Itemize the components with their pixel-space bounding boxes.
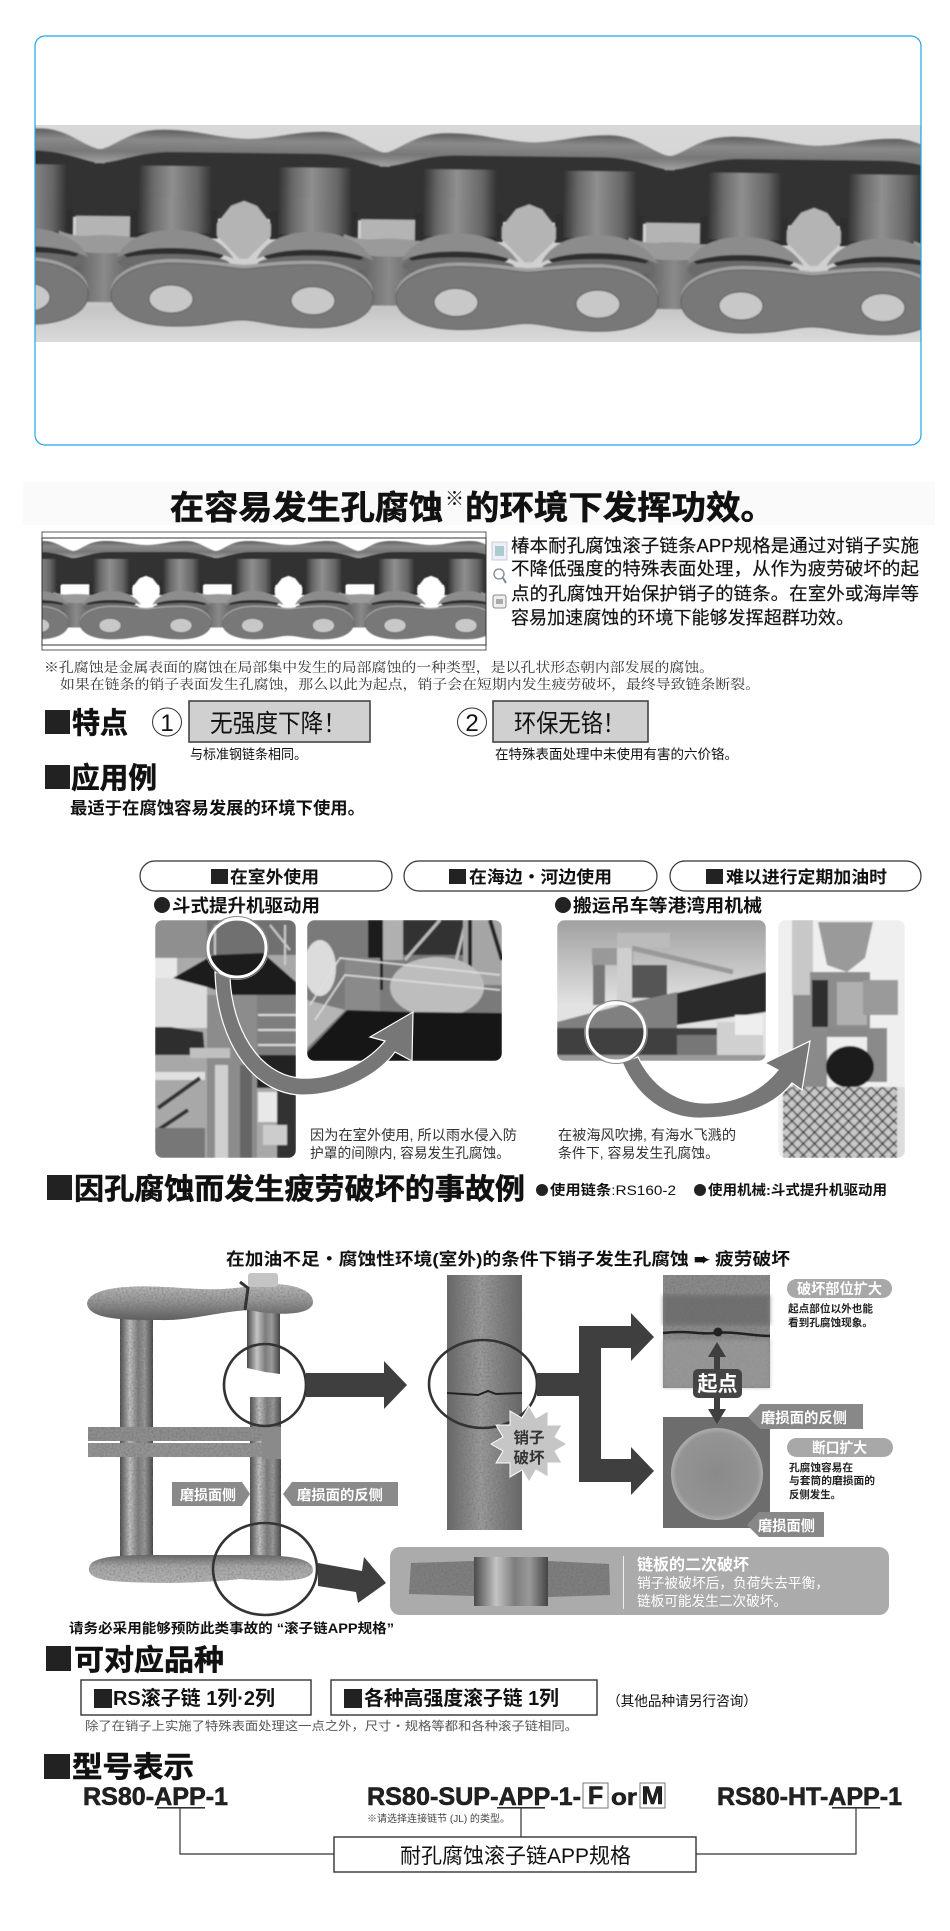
panel: secondary plate failure: 链板可能发生二次破坏。 — [637, 1593, 787, 1609]
caption: crane — [558, 1127, 736, 1161]
intro paragraph: 椿本耐孔腐蚀滚子链条APP规格是通过对销子实施 — [511, 536, 919, 556]
caption: crane: 在被海风吹拂, 有海水飞溅的 — [558, 1127, 736, 1143]
photo: elevator tower — [155, 920, 296, 1158]
tag: worn side — [172, 1482, 250, 1506]
heading: fatigue failure cases: 因孔腐蚀而发生疲劳破坏的事故例 — [74, 1173, 525, 1206]
pill: fracture zoom: 断口扩大 — [812, 1439, 867, 1457]
title band: ※ — [445, 489, 464, 510]
note: pitting location: 孔腐蚀容易在 — [789, 1461, 853, 1474]
title band: 在容易发生孔腐蚀 — [170, 489, 443, 526]
caption: elevator — [310, 1127, 517, 1161]
intro paragraph: 不降低强度的特殊表面处理，从作为疲劳破坏的起 — [511, 559, 919, 579]
panel: hero chain photo — [0, 36, 950, 445]
notice: 请务必采用能够预防此类事故的 “滚子链APP规格” — [69, 1620, 394, 1636]
model: HT: RS80-HT-APP-1 — [717, 1783, 902, 1811]
intro paragraph — [511, 536, 919, 628]
model: SUP with connecting link: M — [642, 1782, 664, 1810]
note: pitting location: 与套筒的磨损面的 — [789, 1474, 875, 1487]
pill: damage zoom: 破坏部位扩大 — [797, 1280, 882, 1298]
middle plates — [88, 1427, 268, 1441]
callout: origin point — [693, 1342, 742, 1424]
heading: features — [45, 707, 128, 740]
marker circle: crack — [429, 1340, 537, 1428]
heading: applications: 应用例 — [71, 762, 157, 795]
case meta: 使用链条 :RS160-2 — [550, 1182, 676, 1198]
photo: gantry crane — [557, 920, 766, 1061]
tag: worn side closeup — [747, 1512, 824, 1537]
feature 2 — [458, 701, 738, 762]
heading: applicable types: 可对应品种 — [74, 1644, 224, 1677]
feature 1: 与标准钢链条相同。 — [190, 746, 307, 762]
note: pitting elsewhere: 看到孔腐蚀现象。 — [788, 1316, 873, 1329]
tag: worn side closeup: 磨损面侧 — [758, 1518, 815, 1535]
panel: secondary plate failure — [390, 1547, 889, 1615]
case meta: 使用机械:斗式提升机驱动用 — [708, 1182, 887, 1198]
label: port cranes: 搬运吊车等港湾用机械 — [573, 895, 762, 916]
pill: seaside use — [404, 861, 657, 891]
note: connecting link type: ※请选择连接链节 (JL) 的类型。 — [367, 1812, 510, 1825]
box: high strength chain: 各种高强度滚子链 1列 — [364, 1686, 559, 1710]
feature 2: 在特殊表面处理中未使用有害的六价铬。 — [495, 746, 738, 762]
box: high strength chain — [331, 1680, 597, 1715]
starburst: pin failure — [491, 1406, 567, 1482]
arrow: elevator to drive unit — [206, 916, 413, 1095]
icon: image toolbar — [492, 542, 507, 608]
photo: fracture closeup — [663, 1417, 770, 1528]
marker circle: pin fracture — [224, 1344, 306, 1426]
heading: features: 特点 — [72, 707, 128, 740]
model: SUP with connecting link: F — [588, 1782, 603, 1810]
caption: elevator: 因为在室外使用, 所以雨水侵入防 — [310, 1127, 517, 1143]
note: pitting elsewhere: 起点部位以外也能 — [788, 1302, 874, 1315]
callout: origin point: 起点 — [698, 1373, 738, 1396]
photo: crane wheel — [778, 920, 905, 1158]
pill: damage zoom — [787, 1279, 892, 1298]
footnote: ※孔腐蚀是金属表面的腐蚀在局部集中发生的局部腐蚀的一种类型，是以孔状形态朝内部发展的腐蚀。 — [44, 659, 714, 676]
bottom plate — [89, 1555, 313, 1583]
model: SUP with connecting link: or — [611, 1784, 637, 1810]
pill: outdoor use: 在室外使用 — [230, 867, 319, 887]
caption: crane: 条件下, 容易发生孔腐蚀。 — [558, 1145, 719, 1161]
arrow: to pin closeup — [306, 1361, 407, 1409]
photo: broken plate — [409, 1557, 610, 1606]
case meta — [536, 1182, 887, 1198]
starburst: pin failure: 破坏 — [513, 1449, 545, 1467]
heading: model notation: 型号表示 — [72, 1751, 194, 1784]
intro paragraph: 容易加速腐蚀的环境下能够发挥超群功效。 — [511, 608, 854, 628]
tag: opposite side of wear — [748, 1404, 863, 1429]
note: pitting elsewhere — [788, 1302, 874, 1329]
starburst: pin failure: 销子 — [513, 1429, 545, 1447]
pin through plates — [262, 1427, 281, 1459]
application subtitle: 最适于在腐蚀容易发展的环境下使用。 — [70, 798, 365, 818]
right pin lower — [250, 1397, 281, 1563]
photo: broken chain link — [87, 1273, 313, 1583]
photo: pin closeup — [447, 1275, 522, 1530]
small chain photo — [0, 532, 531, 650]
panel: secondary plate failure: 链板的二次破坏 — [637, 1555, 749, 1574]
pill: hard to lubricate: 难以进行定期加油时 — [726, 867, 887, 887]
intro paragraph: 点的孔腐蚀开始保护销子的链条。在室外或海岸等 — [511, 584, 919, 604]
label: bucket elevator: 斗式提升机驱动用 — [172, 895, 320, 916]
footnote: 如果在链条的销子表面发生孔腐蚀，那么以此为起点，销子会在短期内发生疲劳破坏，最终导致链条断裂。 — [60, 676, 760, 693]
pill: hard to lubricate — [670, 861, 921, 891]
model: SUP with connecting link: RS80-SUP-APP-1- — [367, 1783, 581, 1811]
caption: elevator: 护罩的间隙内, 容易发生孔腐蚀。 — [310, 1145, 510, 1161]
note: same specifications: 除了在销子上实施了特殊表面处理这一点之外，尺寸・规格等都和各种滚子链相同。 — [85, 1718, 578, 1733]
model: standard: RS80-APP-1 — [83, 1783, 228, 1811]
box: RS chain — [81, 1680, 311, 1715]
arrow: to plate closeup — [318, 1557, 386, 1603]
tag: opposite of worn side — [283, 1482, 398, 1506]
box: APP specification — [334, 1837, 696, 1872]
photo: drive unit — [304, 920, 502, 1061]
tag: opposite of worn side: 磨损面的反侧 — [297, 1487, 383, 1503]
note: pitting location — [789, 1461, 875, 1501]
left pin — [120, 1303, 153, 1561]
footnote — [44, 659, 760, 693]
panel: secondary plate failure: 销子被破坏后，负荷失去平衡， — [637, 1575, 829, 1591]
right pin upper — [247, 1307, 280, 1374]
note: pitting location: 反侧发生。 — [789, 1488, 841, 1501]
marker circle: plate damage — [213, 1523, 317, 1615]
pill: outdoor use — [140, 861, 392, 891]
pill: fracture zoom — [787, 1438, 893, 1457]
pill: seaside use: 在海边・河边使用 — [469, 868, 612, 887]
title band: 的环境下发挥功效。 — [465, 489, 775, 526]
feature 2: 环保无铬！ — [514, 710, 625, 738]
feature 1 — [152, 701, 370, 762]
note: other types: （其他品种请另行咨询） — [607, 1693, 757, 1709]
photo: damage closeup — [663, 1275, 770, 1388]
connectors — [180, 1808, 856, 1854]
arrow: branching connector — [537, 1313, 654, 1495]
pin head — [248, 1273, 278, 1287]
box: APP specification: 耐孔腐蚀滚子链APP规格 — [400, 1845, 631, 1868]
feature 1: 1 — [160, 710, 174, 737]
feature 2: 2 — [465, 710, 479, 737]
arrow: crane to wheel — [584, 1000, 810, 1118]
tag: opposite side of wear: 磨损面的反侧 — [761, 1409, 847, 1427]
feature 1: 无强度下降！ — [210, 710, 346, 738]
case subtitle: 在加油不足・腐蚀性环境(室外)的条件下销子发生孔腐蚀 ➨ 疲劳破坏 — [226, 1249, 790, 1269]
tag: worn side: 磨损面侧 — [180, 1487, 236, 1503]
top plate — [87, 1284, 313, 1320]
box: RS chain: RS滚子链 1列·2列 — [113, 1686, 275, 1710]
title band — [23, 482, 935, 526]
model: SUP with connecting link — [367, 1782, 665, 1811]
